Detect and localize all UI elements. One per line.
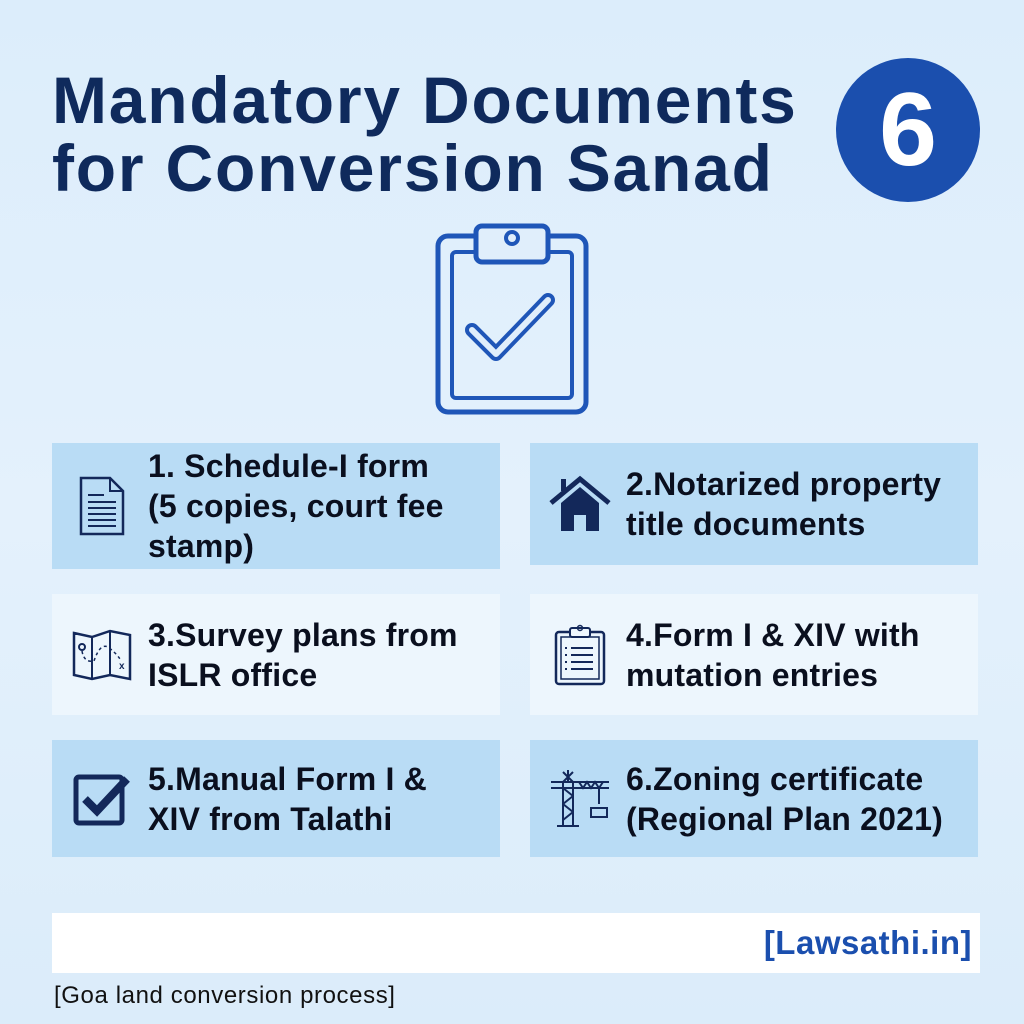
badge: number 6 (836, 58, 980, 202)
panel: item 6 (530, 740, 978, 857)
text: item 6: 6.Zoning certificate (626, 760, 923, 796)
text: item 3: ISLR office (148, 656, 317, 692)
icon: crane (551, 770, 609, 827)
panel: item 2 (530, 443, 978, 565)
text: item 1: (5 copies, court fee (148, 488, 444, 524)
text: item 5: 5.Manual Form I & (148, 760, 427, 796)
text: item 1: stamp) (148, 528, 254, 564)
text: item 1 (148, 448, 444, 564)
title: Mandatory Documents (52, 63, 798, 137)
icon: checkbox (74, 774, 130, 826)
text: item 2: 2.Notarized property (626, 466, 941, 502)
text: item 4: 4.Form I & XIV with (626, 616, 920, 652)
icon: house (550, 476, 610, 531)
footer bar (52, 913, 980, 973)
text: item 3 (148, 616, 458, 692)
icon: map: x (119, 660, 125, 672)
text: item 2: title documents (626, 506, 865, 542)
text: item 4: mutation entries (626, 656, 878, 692)
text: item 2 (626, 466, 941, 542)
text: item 6 (626, 760, 943, 836)
icon: clipboard list (554, 624, 606, 686)
panel: item 1 (52, 443, 500, 569)
panel: item 4 (530, 594, 978, 715)
caption: [Goa land conversion process] (54, 982, 396, 1009)
panel: item 3 (52, 594, 500, 715)
panel: item 5 (52, 740, 500, 857)
text: item 5: XIV from Talathi (148, 800, 392, 836)
badge: number 6: 6 (879, 72, 937, 188)
text: item 4 (626, 616, 920, 692)
text: item 3: 3.Survey plans from (148, 616, 458, 652)
text: item 5 (148, 760, 427, 836)
text: item 6: (Regional Plan 2021) (626, 800, 943, 836)
title: for Conversion Sanad (52, 131, 774, 205)
title (52, 63, 798, 205)
text: item 1: 1. Schedule-I form (148, 448, 429, 484)
icon: clipboard with check (436, 224, 588, 414)
icon: document (80, 476, 124, 536)
icon: map (72, 630, 132, 680)
brand: Lawsathi.in: [Lawsathi.in] (764, 924, 972, 961)
